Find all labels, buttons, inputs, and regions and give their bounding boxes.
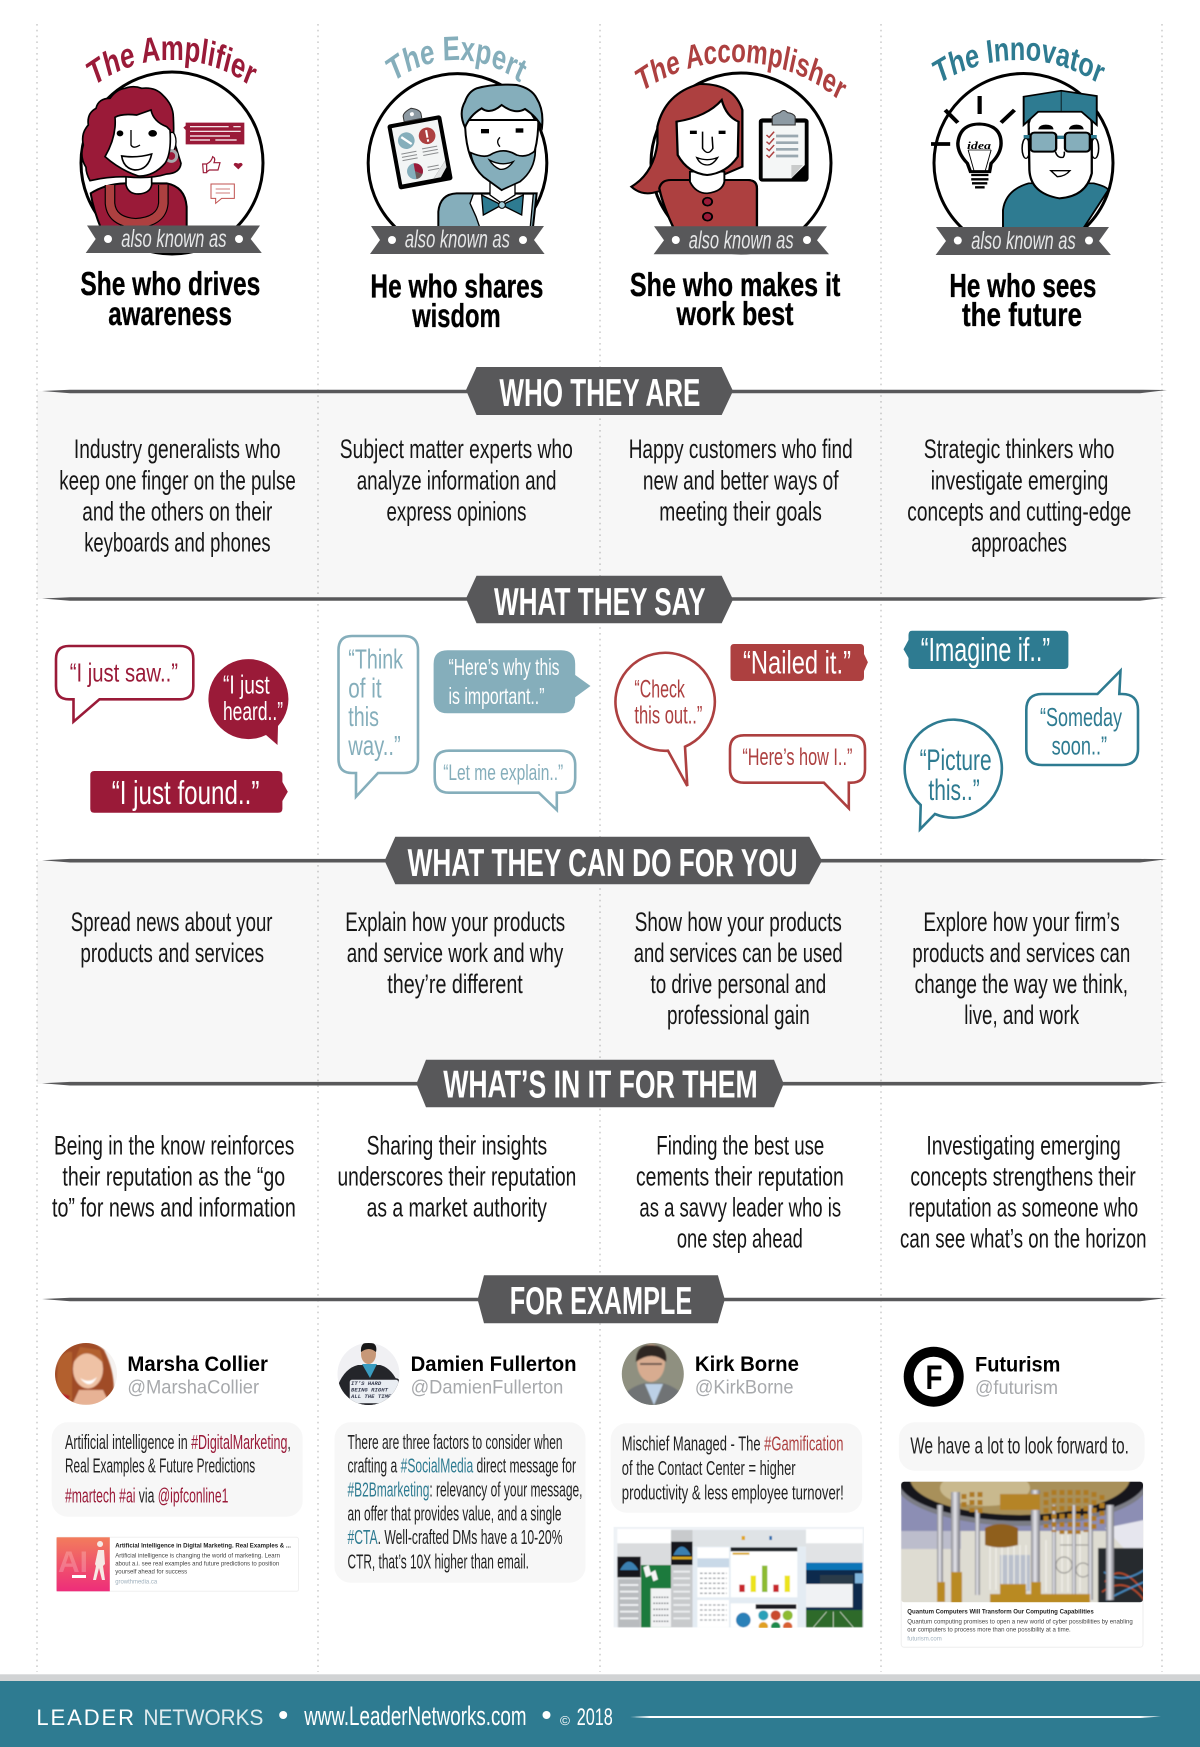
speech tag: I just found: “I just found..” [112, 774, 259, 811]
link card: quantum computers article: our computers to process more than one possibility at a time. [907, 1626, 1071, 1633]
speech bubble: Think of it this way: “Think [348, 643, 404, 674]
speech bubble: Think of it this way: this [348, 701, 379, 732]
subtitle: she who makes it work best: work best [676, 295, 794, 332]
text: amplifier benefits: products and services [80, 938, 264, 968]
avatar: Damien Fullerton: BEING RIGHT [351, 1386, 389, 1394]
subtitle: he who shares wisdom: He who shares [370, 268, 543, 304]
example: Kirk Borne tweet [611, 1343, 865, 1631]
speech bubble: Here's why this is important: is important..” [448, 683, 544, 709]
text: innovator who they are: Strategic thinkers who [924, 434, 1114, 464]
text: accomplisher motivation: as a savvy leader who is [639, 1193, 841, 1223]
tweet text: Real Examples & Future Predictions [65, 1456, 255, 1478]
tweet text: productivity & less employee turnover! [622, 1482, 844, 1504]
text: innovator who they are: investigate emerging [931, 466, 1108, 496]
logo: Leader Networks: LEADER [36, 1705, 134, 1730]
tweet text: CTR, that’s 10X higher than email. [348, 1551, 529, 1573]
text: expert motivation: underscores their reputation [338, 1162, 576, 1192]
text: amplifier motivation: their reputation as the “go [62, 1162, 285, 1192]
subtitle: she who makes it work best [630, 266, 840, 332]
banner: also known as: also known as [971, 227, 1076, 255]
text: accomplisher who they are: new and better ways of [643, 466, 839, 496]
heading: for example [478, 1275, 725, 1323]
tweet text: Mischief Managed - The #Gamification [622, 1434, 843, 1456]
text: amplifier benefits: Spread news about your [71, 907, 273, 937]
subtitle: he who shares wisdom: wisdom [411, 297, 501, 334]
tweet text: #CTA. Well-crafted DMs have a 10-20% [348, 1527, 563, 1549]
text: amplifier motivation [52, 1130, 296, 1223]
speech bubble: Think of it this way: of it [348, 672, 382, 703]
speech bubble: Picture this [905, 720, 1002, 829]
text: accomplisher benefits: professional gain [667, 1000, 810, 1030]
speech bubble: Check this out [615, 653, 715, 786]
speech bubble: Picture this: this..” [928, 774, 980, 807]
subtitle: she who drives awareness: awareness [108, 295, 232, 332]
speech bubble: I just heard: “I just [223, 669, 270, 699]
text: amplifier who they are: Industry generalists who [74, 434, 281, 464]
text: innovator who they are [907, 434, 1131, 558]
text: expert motivation: Sharing their insights [367, 1130, 547, 1160]
speech bubble: Someday soon: “Someday [1040, 702, 1122, 732]
speech bubble: I just saw [56, 646, 193, 722]
avatar: Damien Fullerton: ALL THE TIME [350, 1393, 392, 1400]
text: accomplisher motivation [636, 1130, 844, 1254]
text: innovator benefits [912, 907, 1130, 1030]
text: amplifier who they are: and the others on their [82, 496, 272, 526]
text: amplifier benefits [71, 907, 273, 968]
avatar: Kirk Borne [621, 1343, 684, 1405]
title: The Amplifier: The Amplifier [85, 37, 257, 84]
tweet text: #B2Bmarketing: relevancy of your message, [348, 1480, 582, 1502]
text: expert benefits: Explain how your products [345, 907, 565, 937]
copyright [560, 1704, 613, 1731]
tweet text: of the Contact Center = higher [622, 1458, 796, 1480]
tweet text [611, 1423, 862, 1513]
example: Marsha Collier tweet [52, 1341, 303, 1591]
tweet text: There are three factors to consider when [348, 1432, 562, 1454]
text: accomplisher benefits [634, 907, 843, 1030]
speech bubble: Check this out: “Check [634, 676, 685, 704]
panel: what they say [42, 576, 1167, 829]
text: innovator benefits: live, and work [964, 1000, 1080, 1030]
heading: what's in it for them: WHAT’S IN IT FOR THEM [443, 1064, 758, 1107]
speech tag: Imagine if: “Imagine if..” [921, 631, 1050, 668]
name: Kirk Borne: Kirk Borne [695, 1353, 799, 1376]
text: expert who they are: analyze information and [357, 466, 556, 496]
icon: idea label in bulb: idea [967, 140, 992, 152]
avatar: Damien Fullerton [337, 1342, 400, 1405]
text: accomplisher who they are: meeting their goals [659, 496, 822, 526]
text: accomplisher benefits: and services can be used [634, 938, 843, 968]
logo: Leader Networks: NETWORKS [144, 1705, 263, 1730]
avatar: Futurism logo: F [926, 1359, 942, 1397]
name: Futurism: Futurism [975, 1354, 1060, 1377]
text: amplifier who they are: keep one finger on the pulse [59, 466, 296, 496]
link card: growthmedia article [57, 1537, 298, 1591]
link card: growthmedia article: Artificial Intelligence in Digital Marketing. Real Examples & ... [115, 1543, 291, 1550]
text: accomplisher benefits: to drive personal and [650, 969, 826, 999]
image: software dashboard screenshots [613, 1527, 865, 1631]
panel: the expert persona [366, 36, 548, 334]
banner: also known as: also known as [689, 226, 794, 254]
text: amplifier who they are [59, 434, 296, 558]
example: Damien Fullerton tweet [334, 1342, 586, 1583]
footer [0, 1674, 1200, 1747]
heading: who they are: WHO THEY ARE [499, 372, 700, 415]
website url: www.LeaderNetworks.com [304, 1701, 526, 1731]
heading: what they say: WHAT THEY SAY [494, 581, 706, 624]
speech bubble: I just heard [208, 659, 288, 745]
copyright: 2018 [577, 1704, 613, 1731]
heading: what they say [466, 576, 733, 624]
text: innovator who they are: approaches [971, 528, 1067, 558]
icon: amplifier portrait [81, 72, 263, 254]
speech tag: Nailed it: “Nailed it.” [743, 644, 851, 680]
text: expert benefits: and service work and why [347, 938, 564, 968]
tweet text [334, 1422, 586, 1583]
tweet text: Artificial intelligence in #DigitalMarketing, [65, 1432, 291, 1454]
panel: what they can do for you [37, 837, 1167, 1084]
subtitle: he who shares wisdom [370, 268, 543, 334]
tweet text [899, 1422, 1145, 1471]
speech bubble: Let me explain: “Let me explain..” [443, 760, 563, 785]
logo: Leader Networks [36, 1705, 263, 1730]
name: Damien Fullerton: Damien Fullerton [411, 1353, 577, 1376]
text: expert who they are: Subject matter experts who [340, 434, 573, 464]
text: amplifier who they are: keyboards and phones [84, 528, 271, 558]
text: accomplisher motivation: one step ahead [677, 1224, 803, 1254]
text: expert who they are: express opinions [386, 496, 526, 526]
link card: quantum computers article: Quantum computing promises to open a new world of cyber possibilities by enabling [907, 1618, 1133, 1625]
panel: who they are [37, 367, 1167, 599]
speech bubble: Someday soon: soon..” [1052, 730, 1107, 760]
title: The Innovator: The Innovator [931, 40, 1105, 82]
link card: growthmedia article: AI [58, 1546, 88, 1579]
text: accomplisher who they are [629, 434, 853, 526]
speech bubble: Here's how I: “Here’s how I..” [742, 744, 852, 771]
text: accomplisher motivation: cements their reputation [636, 1162, 844, 1192]
speech bubble: Here's how I [730, 735, 865, 808]
text: accomplisher motivation: Finding the best use [656, 1130, 824, 1160]
title: The Accomplisher: The Accomplisher [634, 44, 846, 98]
link card: quantum computers article: Quantum Computers Will Transform Our Computing Capabilities [907, 1609, 1094, 1616]
tweet text: crafting a #SocialMedia direct message for [348, 1456, 576, 1478]
text: innovator motivation [900, 1130, 1146, 1254]
panel: the amplifier persona [80, 37, 264, 332]
handle: KirkBorne: @KirkBorne [695, 1376, 794, 1398]
banner: also known as: also known as [405, 226, 510, 254]
example: Futurism tweet [894, 1347, 1150, 1647]
handle: DamienFullerton: @DamienFullerton [411, 1376, 563, 1398]
link card: growthmedia article: yourself ahead for success [115, 1568, 187, 1575]
speech bubble: Think of it this way: way..” [348, 730, 401, 761]
speech bubble: Here's why this is important [434, 650, 590, 713]
subtitle: she who drives awareness: She who drives [80, 265, 260, 302]
tweet text: an offer that provides value, and a single [348, 1504, 562, 1526]
link card: quantum computers article: futurism.com [907, 1636, 942, 1643]
speech bubble: Check this out: this out..” [634, 701, 702, 729]
speech bubble: Here's why this is important: “Here’s why this [448, 654, 560, 680]
text: accomplisher benefits: Show how your products [635, 907, 842, 937]
copyright: © [560, 1713, 570, 1728]
tweet text [52, 1422, 303, 1517]
handle: futurism: @futurism [975, 1377, 1058, 1399]
text: expert benefits [345, 907, 565, 999]
image: quantum computer photo [901, 1482, 1143, 1602]
icon: accomplisher portrait [651, 73, 831, 253]
speech bubble: Think of it this way [338, 636, 418, 797]
link card: growthmedia article: about a.i. see real examples and future predictions to position [115, 1561, 280, 1568]
text: expert who they are [340, 434, 573, 526]
subtitle: he who sees the future: the future [962, 296, 1082, 333]
text: innovator motivation: Investigating emerging [926, 1130, 1121, 1160]
speech bubble: I just saw: “I just saw..” [70, 658, 178, 688]
panel: the innovator persona [931, 40, 1114, 333]
text: innovator benefits: Explore how your firm’s [923, 907, 1120, 937]
subtitle: she who makes it work best: She who makes it [630, 266, 840, 303]
link card: growthmedia article: growthmedia.ca [115, 1578, 158, 1585]
subtitle: he who sees the future: He who sees [949, 267, 1096, 304]
heading: what they can do for you [385, 837, 822, 885]
link card: quantum computers article [900, 1481, 1144, 1648]
panel: what's in it for them [42, 1060, 1167, 1254]
speech bubble: Picture this: “Picture [920, 744, 992, 777]
icon: innovator portrait [934, 74, 1113, 252]
text: expert motivation [338, 1130, 576, 1223]
speech bubble: I just heard: heard..” [223, 696, 283, 726]
title: The Expert: The Expert [384, 36, 526, 82]
text: amplifier motivation: to” for news and information [52, 1193, 296, 1223]
avatar: Futurism logo [904, 1347, 964, 1407]
panel: the accomplisher persona [630, 44, 846, 332]
text: expert benefits: they’re different [387, 969, 523, 999]
avatar: Damien Fullerton: IT’S HARD [351, 1380, 382, 1387]
speech bubble: Someday soon [1026, 671, 1138, 765]
text: amplifier motivation: Being in the know reinforces [54, 1130, 294, 1160]
heading: who they are [466, 367, 733, 415]
avatar: Marsha Collier [53, 1341, 117, 1405]
heading: what's in it for them [416, 1060, 784, 1107]
text: expert motivation: as a market authority [367, 1193, 547, 1223]
banner: also known as: also known as [121, 225, 227, 253]
heading: for example: FOR EXAMPLE [510, 1280, 692, 1323]
text: accomplisher who they are: Happy customers who find [629, 434, 853, 464]
link card: growthmedia article: Artificial intelligence is changing the world of marketing. Learn [115, 1553, 280, 1560]
speech bubble: Let me explain [435, 751, 575, 810]
panel: for example [42, 1275, 1167, 1647]
icon: expert portrait [368, 74, 547, 252]
heading: what they can do for you: WHAT THEY CAN DO FOR YOU [408, 842, 798, 885]
tweet text: #martech #ai via @ipfconline1 [65, 1486, 228, 1508]
subtitle: he who sees the future [949, 267, 1096, 333]
handle: MarshaCollier: @MarshaCollier [127, 1376, 260, 1398]
subtitle: she who drives awareness [80, 265, 260, 332]
name: Marsha Collier: Marsha Collier [127, 1353, 268, 1376]
